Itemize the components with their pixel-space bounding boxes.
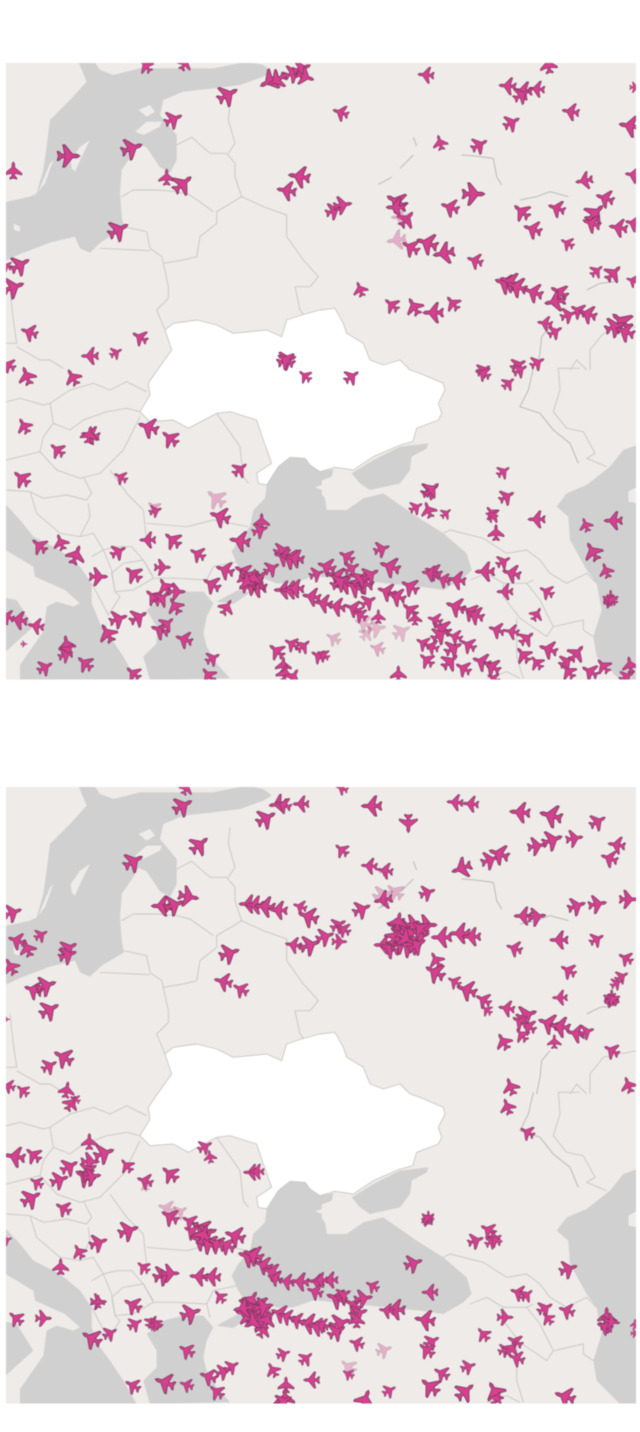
base map geography [0,786,637,1404]
land background [6,787,636,1404]
panel: map after [0,779,640,1414]
base map geography [0,62,637,680]
planes after [0,779,640,1414]
land background [6,63,636,680]
panel: map before [0,53,640,688]
planes before [0,53,640,688]
